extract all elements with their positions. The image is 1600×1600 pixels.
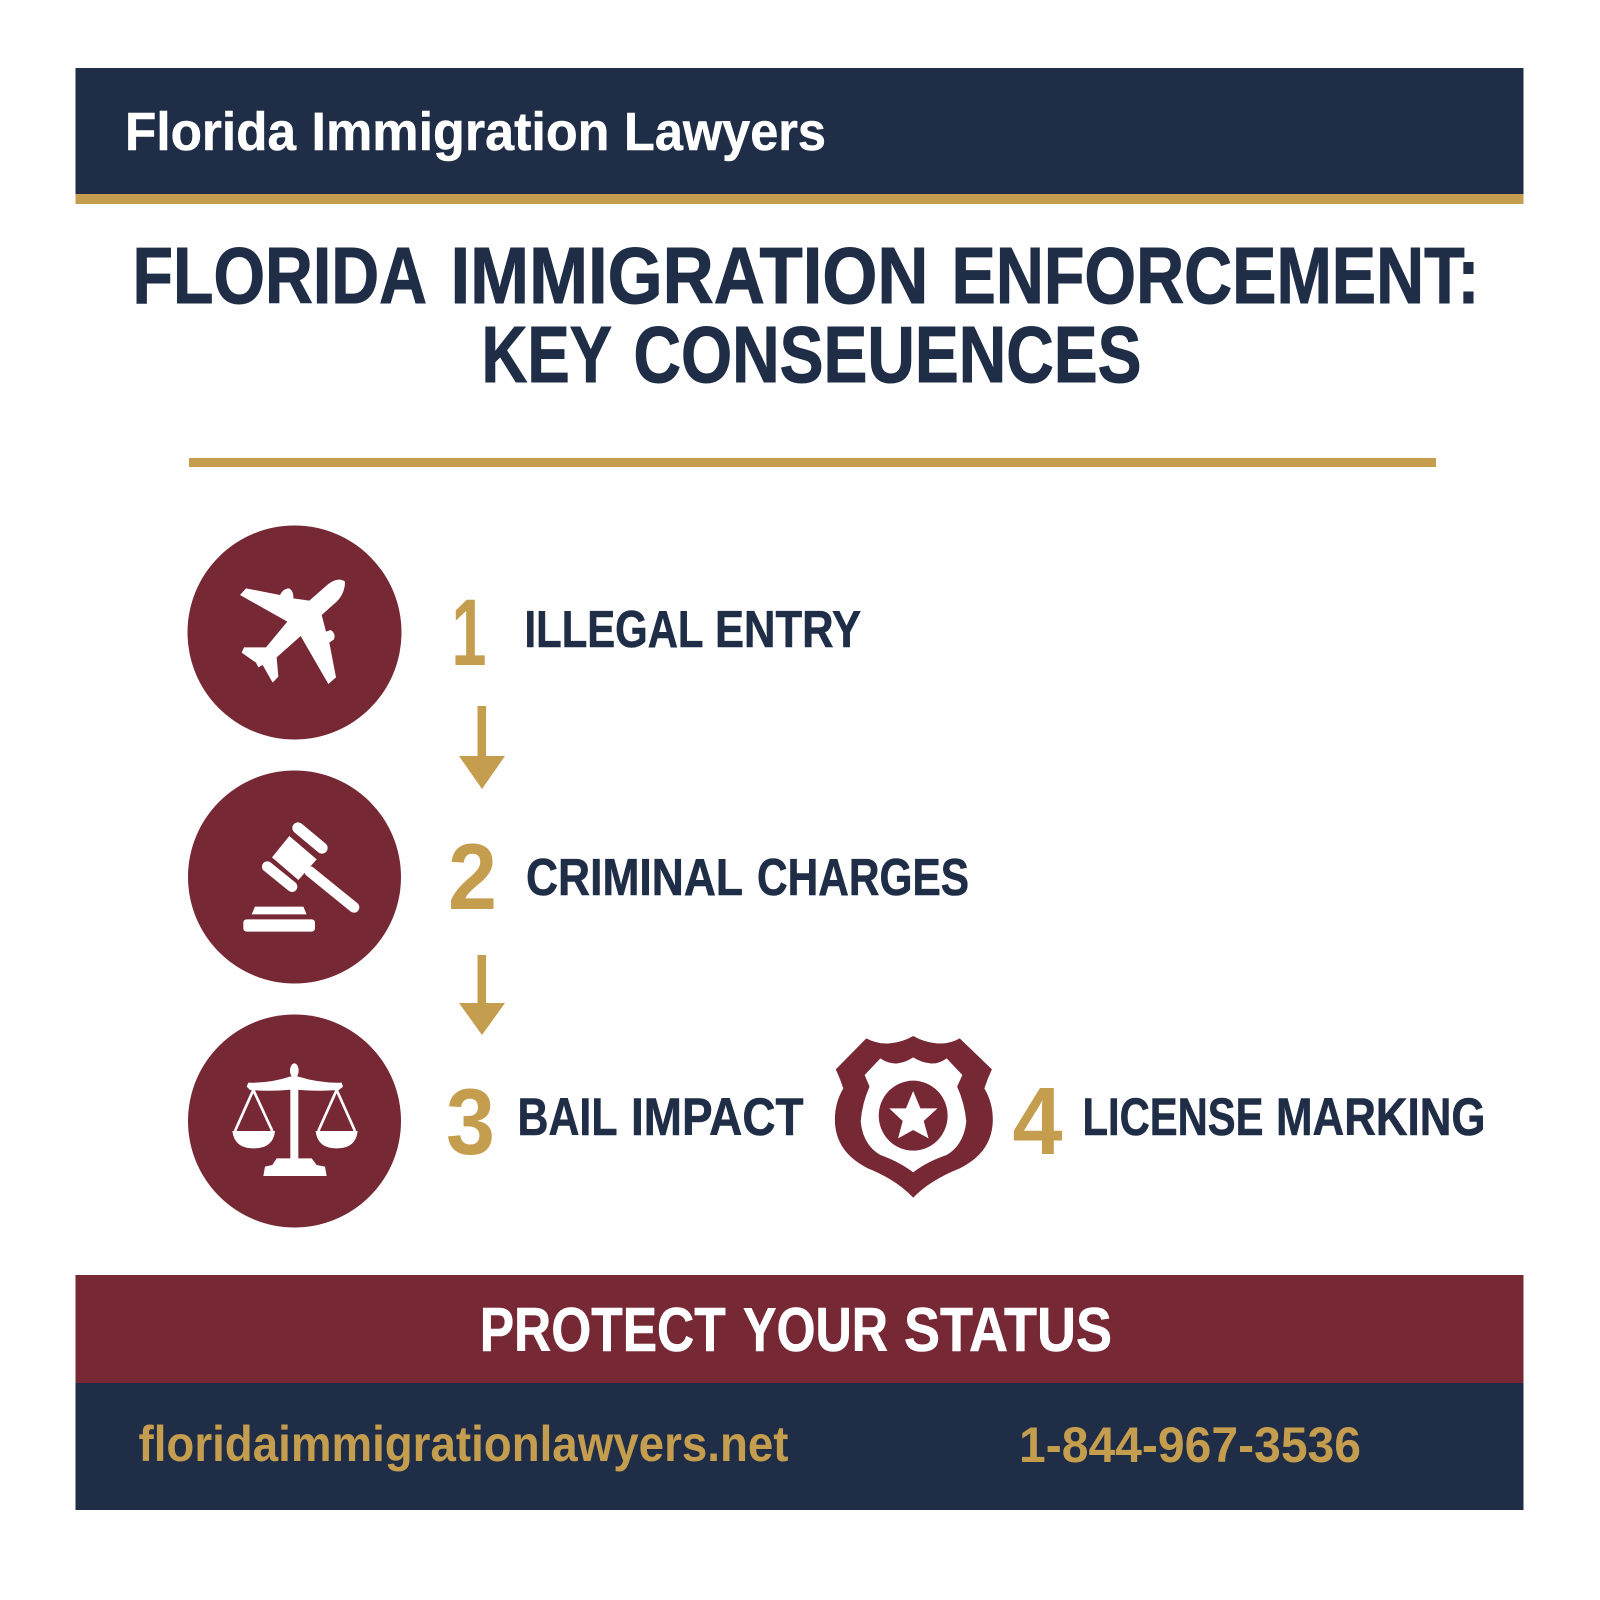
number 3: 3 bbox=[446, 1069, 495, 1174]
website: floridaimmigrationlawyers.net bbox=[138, 1416, 789, 1472]
title: FLORIDA bbox=[132, 231, 427, 320]
label: license marking: LICENSE bbox=[1082, 1088, 1264, 1147]
brand name bbox=[125, 102, 826, 162]
number 4: 4 bbox=[1012, 1068, 1062, 1175]
brand name: Immigration bbox=[312, 102, 610, 162]
icon: gavel bbox=[188, 770, 401, 984]
panel: header band bbox=[76, 68, 1524, 204]
call to action text: PROTECT bbox=[480, 1296, 726, 1365]
number 2: 2 bbox=[448, 824, 497, 929]
panel: contact footer bbox=[76, 1383, 1524, 1510]
call to action text bbox=[480, 1296, 1112, 1365]
title: ENFORCEMENT: bbox=[952, 231, 1480, 320]
label: illegal entry: ILLEGAL bbox=[524, 601, 704, 659]
step 2: criminal charges bbox=[188, 770, 969, 984]
arrow: step 1 to 2 bbox=[459, 706, 505, 789]
phone number: 1-844-967-3536 bbox=[1019, 1417, 1361, 1473]
label: criminal charges bbox=[526, 849, 969, 907]
label: bail impact bbox=[518, 1088, 804, 1147]
title: IMMIGRATION bbox=[450, 231, 928, 320]
icon: police badge bbox=[835, 1036, 993, 1198]
title divider bbox=[189, 458, 1436, 467]
brand name: Florida bbox=[125, 102, 297, 162]
arrow: step 2 to 3 bbox=[459, 955, 505, 1035]
brand name: Lawyers bbox=[624, 102, 826, 162]
label: illegal entry: ENTRY bbox=[715, 601, 861, 659]
label: license marking bbox=[1082, 1088, 1486, 1147]
panel: call to action band bbox=[76, 1275, 1524, 1383]
icon: scales of justice bbox=[188, 1014, 401, 1228]
title: KEY bbox=[482, 310, 612, 399]
call to action text: STATUS bbox=[904, 1296, 1112, 1365]
label: criminal charges: CHARGES bbox=[757, 849, 969, 907]
call to action text: YOUR bbox=[743, 1296, 888, 1365]
label: bail impact: IMPACT bbox=[631, 1088, 804, 1147]
label: criminal charges: CRIMINAL bbox=[526, 849, 743, 907]
icon: airplane bbox=[188, 526, 402, 740]
step 3: bail impact bbox=[188, 1014, 804, 1228]
label: illegal entry bbox=[524, 601, 861, 659]
title: CONSEUENCES bbox=[634, 310, 1142, 399]
step 4: license marking bbox=[835, 1036, 1486, 1198]
step 1: illegal entry bbox=[188, 526, 861, 740]
number 1: 1 bbox=[452, 580, 486, 686]
label: bail impact: BAIL bbox=[518, 1088, 618, 1147]
label: license marking: MARKING bbox=[1276, 1088, 1486, 1147]
title bbox=[132, 231, 1480, 399]
